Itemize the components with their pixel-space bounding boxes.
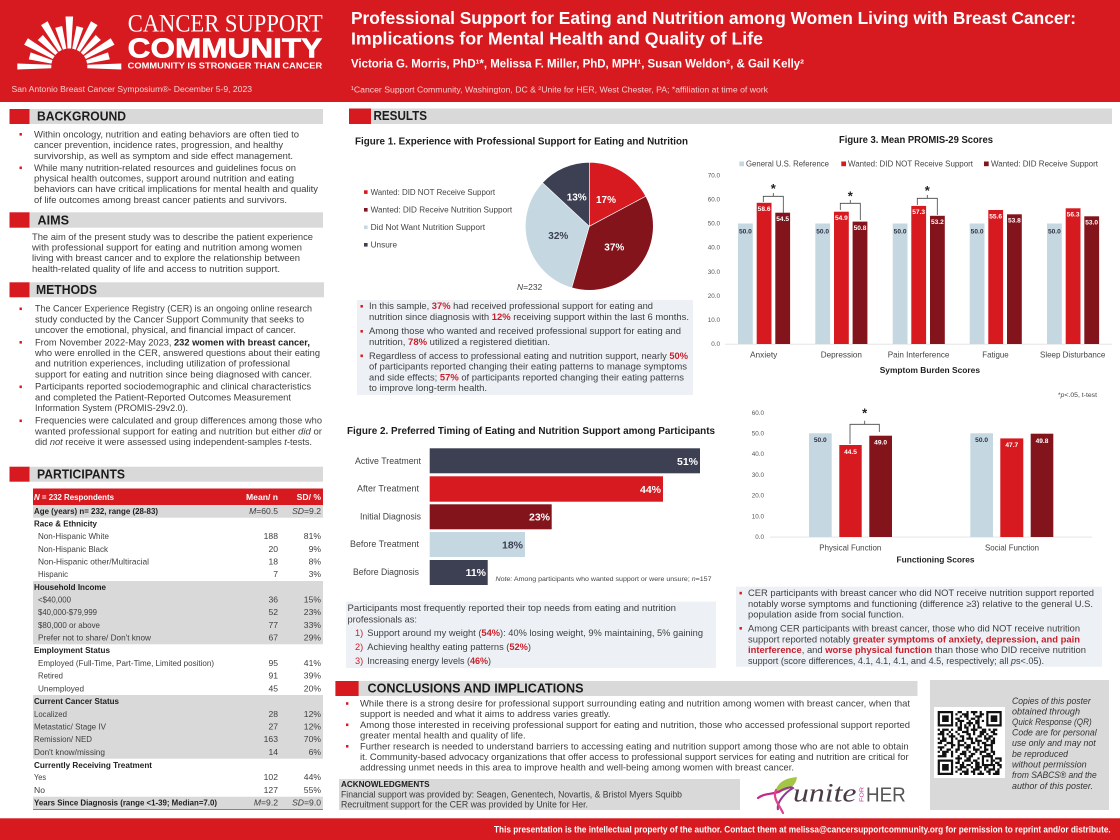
text block: methods bullets: uncover the emotional, physical, and financial impact of cancer. (35, 325, 296, 335)
bar chart: symptom burden scores: 50.8 (854, 225, 867, 232)
table: respondent characteristics: $40,000-$79,999 (38, 607, 97, 617)
callout: figure 3 findings: notably worse symptoms and functioning (difference ≥3) relative to the general U.S. (748, 599, 1093, 609)
table: respondent characteristics: 91 (268, 670, 278, 680)
legend: figure 1: Unsure (371, 240, 397, 250)
horizontal bar chart: Active Treatment (355, 456, 422, 466)
significance brackets (763, 181, 937, 220)
table: respondent characteristics: 52 (268, 607, 278, 617)
legend: figure 1 (364, 187, 513, 250)
table: respondent characteristics: Age (years) n= 232, range (28-83) (34, 506, 158, 516)
table: respondent characteristics: M=60.5 (249, 506, 278, 516)
table: respondent characteristics: 70% (304, 734, 321, 744)
bar chart: functioning scores: Physical Function (819, 543, 882, 553)
table: respondent characteristics: Don't know/missing (34, 747, 105, 757)
horizontal bar chart: After Treatment (357, 484, 420, 494)
table: respondent characteristics: SD=9.2 (292, 506, 321, 516)
text block: QR notice: from SABCS® and the (1012, 770, 1097, 780)
table: respondent characteristics: 7 (273, 569, 278, 579)
text block: conclusions: Among those interested in receiving professional support for eating and nutrition, those who accessed professional support reported (360, 720, 910, 730)
table: respondent characteristics: 14 (268, 747, 278, 757)
text block: methods bullets: and nutrition experiences, including utilization of professional (35, 359, 290, 369)
table: respondent characteristics: 45 (268, 684, 278, 694)
text block: background bullets: of life outcomes among breast cancer patients and survivors. (34, 195, 287, 205)
text block: background bullets: While many nutrition-related resources and guidelines focus on (34, 163, 296, 173)
callout: top needs: Support around my weight (54%): 40% losing weight, 9% maintaining, 5% gaining (367, 628, 703, 638)
callout: figure 1 findings: Regardless of access to professional eating and nutrition support, nearly 50% (369, 351, 688, 361)
callout: top needs: Achieving healthy eating patterns (52%) (367, 642, 531, 652)
logo: Unite for HER: HER (866, 784, 906, 807)
text block: methods bullets: Frequencies were calculated and group differences among those who (35, 416, 322, 426)
horizontal bar chart: 11% (466, 567, 487, 579)
logo: Unite for HER: unite (793, 779, 856, 808)
significance bracket: * (862, 406, 868, 420)
horizontal bar chart (350, 448, 700, 585)
figure 3 title: Figure 3. Mean PROMIS-29 Scores (839, 135, 993, 146)
panel: acknowledgments: Recruitment support for the CER was provided by Unite for Her. (341, 799, 588, 809)
text block: aims: living with breast cancer and to explore the relationship between (32, 253, 300, 263)
text block: QR notice: be reproduced (1012, 749, 1069, 759)
table: respondent characteristics: 12% (304, 722, 321, 732)
text block: conclusions: support is needed and what it aims to address varies greatly. (360, 709, 610, 719)
table: respondent characteristics: M=9.2 (254, 798, 278, 808)
pie labels: 32% (548, 231, 568, 242)
callout: figure 3 findings: Among CER participants with breast cancer, those who did NOT receive nutrition (748, 624, 1080, 634)
callout: figure 1 findings: nutrition since diagnosis with 12% receiving support within the last 6 months. (369, 312, 689, 322)
text block: conclusions: addressing unmet needs in this area to improve health and well-being among women with breast cancer. (360, 763, 794, 773)
icon: QR code (934, 707, 1005, 778)
bar chart: symptom burden scores: 53.0 (1085, 220, 1098, 227)
bar chart: symptom burden scores: 55.6 (989, 213, 1002, 220)
bar chart: symptom burden scores: 0.0 (711, 341, 720, 348)
authors: Victoria G. Morris, PhD¹*, Melissa F. Miller, PhD, MPH¹, Susan Weldon², & Gail Kelly² (351, 59, 804, 71)
table: respondent characteristics: Mean/ n (246, 492, 278, 502)
text block: aims: The aim of the present study was to describe the patient experience (32, 232, 313, 242)
heading: results: RESULTS (374, 108, 427, 123)
text block: methods bullets: who were enrolled in the CER, answered questions about their eating (34, 348, 320, 358)
bar chart: functioning scores: 20.0 (752, 493, 764, 500)
table: respondent characteristics: 188 (264, 531, 278, 541)
text block: methods bullets: did not receive it were assessed using independent-samples t-tests. (35, 437, 312, 447)
text block: methods bullets (20, 304, 322, 447)
bar chart: symptom burden scores: 54.9 (835, 215, 848, 222)
callout: top needs: professionals as: (348, 614, 417, 624)
text block: QR notice: Quick Response (QR) (1012, 717, 1092, 727)
pie labels: 37% (604, 243, 624, 254)
table: respondent characteristics: 102 (264, 772, 278, 782)
text block: background bullets: behaviors can have critical implications for mental health and quality (34, 184, 318, 194)
figure 1 title: Figure 1. Experience with Professional Support for Eating and Nutrition (355, 136, 688, 148)
table: respondent characteristics: Remission/ NED (34, 734, 92, 744)
axis title: functioning: Functioning Scores (896, 554, 975, 564)
bar chart: symptom burden scores: 54.5 (776, 216, 789, 223)
table: respondent characteristics: 9% (309, 544, 321, 554)
panel: methods (10, 282, 324, 447)
callout: figure 3 findings: interference, and worse physical function than those who DID receive nutrition (748, 645, 1086, 655)
text block: QR notice: Code are for personal (1012, 727, 1098, 737)
pie chart (525, 162, 653, 290)
horizontal bar chart: Before Diagnosis (353, 567, 420, 577)
callout: top needs: Increasing energy levels (46%) (367, 656, 491, 666)
table: respondent characteristics: 33% (304, 620, 321, 630)
bar chart: symptom burden scores: 50.0 (894, 228, 907, 236)
bar chart: functioning scores: 49.0 (874, 440, 887, 446)
bar chart: functioning scores: Social Function (985, 543, 1039, 553)
table: respondent characteristics: Household Income (34, 582, 106, 592)
pie labels (548, 192, 624, 254)
panel: acknowledgments (339, 779, 740, 810)
table: respondent characteristics: Years Since Diagnosis (range <1-39; Median=7.0) (34, 798, 217, 808)
heading: methods (10, 282, 324, 297)
table: respondent characteristics: Race & Ethnicity (34, 518, 97, 528)
text block: methods bullets: support for eating and nutrition since being diagnosed with cancer. (35, 369, 312, 379)
legend: figure 3: Wanted: DID NOT Receive Support (848, 159, 974, 169)
text block: QR notice (1012, 696, 1098, 791)
table: respondent characteristics: 8% (309, 556, 321, 566)
bar chart: symptom burden scores: 50.0 (708, 221, 720, 228)
text block: conclusions: Further research is needed to understand barriers to accessing eating and nutrition support among those who are not able to obtain (360, 741, 909, 751)
text block: aims: health-related quality of life and access to nutrition support. (32, 264, 280, 274)
callout: figure 3 findings: population aside from social function. (748, 610, 904, 620)
table: respondent characteristics: SD=9.0 (292, 798, 321, 808)
legend: figure 1: Wanted: DID Receive Nutrition Support (371, 205, 513, 215)
bar chart: symptom burden scores: 58.6 (758, 206, 771, 213)
text block: methods bullets: From November 2022-May 2023, 232 women with breast cancer, (35, 337, 310, 347)
bar chart: symptom burden scores (708, 172, 1112, 375)
bar chart: functioning scores: 60.0 (752, 410, 764, 417)
bar chart: symptom burden scores: 10.0 (708, 317, 720, 324)
legend: figure 1: Did Not Want Nutrition Support (371, 222, 486, 232)
bar chart: symptom burden scores: 56.3 (1067, 212, 1080, 219)
bar chart: symptom burden scores: 30.0 (708, 269, 720, 276)
table: respondent characteristics: 163 (264, 734, 278, 744)
table: respondent characteristics: 6% (309, 747, 321, 757)
table: respondent characteristics: 95 (268, 658, 278, 668)
text block: aims: with professional support for eating and nutrition among women (31, 243, 302, 253)
text block: QR notice: author of this poster. (1012, 781, 1093, 791)
bar chart: symptom burden scores: 53.8 (1008, 218, 1021, 225)
table: respondent characteristics: <$40,000 (38, 594, 71, 604)
heading: results (349, 108, 1112, 124)
panel: aims (10, 212, 323, 274)
callout: top needs: 1) (355, 628, 363, 638)
text block: conclusions: greater mental health and quality of life. (360, 731, 526, 741)
footer banner (0, 818, 1120, 840)
callout: top needs: 3) (355, 656, 363, 666)
callout: figure 3 findings: support (score differences, 4.1, 4.1, 4.1, and 4.5, respectively; all ps<.05). (748, 656, 1044, 666)
table: respondent characteristics: 28 (268, 709, 278, 719)
text block: methods bullets: Information System (PROMIS-29v2.0). (35, 403, 188, 413)
table: respondent characteristics: Metastatic/ Stage IV (34, 722, 106, 732)
logo: Cancer Support Community (17, 11, 323, 70)
horizontal bar chart: 44% (640, 484, 662, 496)
title (351, 8, 1076, 48)
callout: figure 1 findings: nutrition, 78% utilized a registered dietitian. (369, 337, 550, 347)
text block: methods bullets: The Cancer Experience Registry (CER) is an ongoing online research (35, 304, 312, 314)
heading: participants: PARTICIPANTS (37, 466, 125, 481)
table: respondent characteristics: 15% (304, 594, 321, 604)
table: respondent characteristics: 55% (304, 785, 321, 795)
table: respondent characteristics: Current Cancer Status (34, 696, 119, 706)
table: respondent characteristics: Non-Hispanic other/Multiracial (38, 556, 149, 566)
bar chart: symptom burden scores: 70.0 (708, 172, 720, 179)
bar chart: functioning scores: 49.8 (1036, 438, 1049, 445)
text block: background bullets (20, 130, 318, 205)
logo: Unite for HER (758, 777, 906, 813)
callout: figure 1 findings: and side effects; 57% of participants reported changing their eating patterns (369, 372, 684, 382)
table: respondent characteristics: SD/ % (297, 492, 321, 502)
bar chart: functioning scores: 50.0 (814, 437, 827, 444)
table: respondent characteristics: 27 (268, 722, 278, 732)
legend: figure 1: Wanted: DID NOT Receive Support (371, 187, 496, 197)
bar chart: symptom burden scores: 50.0 (816, 228, 829, 236)
logo: Cancer Support Community: COMMUNITY IS STRONGER THAN CANCER (128, 60, 323, 70)
table: respondent characteristics: $80,000 or above (38, 620, 100, 630)
table: respondent characteristics: 81% (304, 531, 321, 541)
legend: figure 3: General U.S. Reference (746, 159, 829, 169)
table: respondent characteristics: Localized (34, 709, 67, 719)
callout: figure 3 findings (736, 587, 1102, 667)
heading: aims: AIMS (38, 212, 69, 227)
title: Professional Support for Eating and Nutrition among Women Living with Breast Cancer: (351, 8, 1076, 28)
table: respondent characteristics: 127 (264, 785, 278, 795)
table: respondent characteristics: 20% (304, 684, 321, 694)
heading: participants (10, 466, 323, 482)
logo: Cancer Support Community: COMMUNITY (128, 32, 323, 63)
heading: conclusions: CONCLUSIONS AND IMPLICATIONS (368, 681, 584, 696)
table: respondent characteristics: 41% (304, 658, 321, 668)
heading: methods: METHODS (36, 282, 97, 297)
table: respondent characteristics: N = 232 Respondents (34, 492, 114, 502)
callout: figure 3 findings: support reported notably greater symptoms of anxiety, depression, and pain (748, 634, 1080, 644)
table: respondent characteristics: Unemployed (38, 684, 84, 694)
table: respondent characteristics: 3% (309, 569, 321, 579)
horizontal bar chart: Initial Diagnosis (360, 512, 422, 522)
bar chart: functioning scores (752, 406, 1092, 564)
note: figure 2: Note: Among participants who wanted support or were unsure; n=157 (496, 576, 712, 583)
text block: QR notice: Copies of this poster (1012, 696, 1092, 706)
table: respondent characteristics: Non-Hispanic Black (38, 544, 109, 554)
table: respondent characteristics: Retired (38, 670, 63, 680)
title: Implications for Mental Health and Quality of Life (351, 28, 763, 48)
horizontal bar chart: Before Treatment (350, 539, 420, 549)
bar chart: functioning scores: 0.0 (755, 534, 764, 541)
panel: acknowledgments: Financial support was provided by: Seagen, Genentech, Novartis, & Bristol Myers Squibb (341, 789, 682, 799)
table: respondent characteristics: Prefer not to share/ Don't know (38, 632, 152, 642)
text block: methods bullets: Participants reported sociodemographic and clinical characteristics (35, 382, 311, 392)
text block: methods bullets: wanted professional support for eating and nutrition but either did or (34, 426, 322, 436)
axis title: symptom burden: Symptom Burden Scores (880, 365, 980, 375)
significance brackets: * (771, 181, 777, 196)
table: respondent characteristics: 29% (304, 632, 321, 642)
bar chart: functioning scores: 30.0 (752, 472, 764, 479)
bar chart: symptom burden scores: Fatigue (982, 350, 1009, 360)
bar chart: symptom burden scores: Pain Interference (888, 350, 950, 360)
table: respondent characteristics: Hispanic (38, 569, 69, 579)
panel: acknowledgments: ACKNOWLEDGMENTS (341, 779, 430, 789)
text block: methods bullets: study conducted by the Cancer Support Community that seeks to (35, 314, 304, 324)
panel: figure 1 pie chart (355, 136, 693, 395)
panel: participants (10, 466, 323, 810)
bar chart: symptom burden scores: 50.0 (739, 228, 752, 236)
panel: figure 3 symptom chart (708, 135, 1112, 399)
text block: conclusions: While there is a strong desire for professional support surrounding eating and nutrition among women with breast cancer, when that (360, 698, 910, 708)
panel: conclusions (335, 681, 917, 773)
logo: Unite for HER: FOR (860, 787, 866, 802)
callout: top needs: Participants most frequently reported their top needs from eating and nutrition (348, 603, 676, 613)
significance note: *p<.05, t-test (1058, 392, 1097, 399)
table: respondent characteristics: 39% (304, 670, 321, 680)
bar chart: symptom burden scores: 50.0 (971, 228, 984, 236)
text block: conclusions (346, 698, 910, 773)
heading: aims (10, 212, 323, 228)
table: respondent characteristics: 77 (268, 620, 278, 630)
bar chart: symptom burden scores: 40.0 (708, 245, 720, 252)
bar chart: symptom burden scores: Depression (821, 350, 862, 360)
conference line: San Antonio Breast Cancer Symposium®- December 5-9, 2023 (12, 84, 252, 94)
horizontal bar chart: 23% (529, 512, 551, 524)
table: respondent characteristics: 20 (268, 544, 278, 554)
significance bracket (850, 406, 879, 444)
text block: methods bullets: and completed the Patient-Reported Outcomes Measurement (35, 392, 291, 402)
callout: figure 1 findings: to improve long-term health. (369, 383, 487, 393)
table: respondent characteristics: No (34, 785, 45, 795)
table: respondent characteristics: Non-Hispanic White (38, 531, 109, 541)
text block: background bullets: survivorship, as well as symptom and side effect management. (34, 151, 293, 161)
text block: background bullets: Within oncology, nutrition and eating behaviors are often tied to (34, 130, 299, 140)
text block: background bullets: physical health outcomes, support around nutrition and eating (34, 174, 294, 184)
figure 2 title: Figure 2. Preferred Timing of Eating and Nutrition Support among Participants (347, 426, 715, 437)
callout: figure 1 findings: of participants reported changing their eating patterns to manage symptoms (369, 362, 687, 372)
logo: Cancer Support Community: CANCER SUPPORT (128, 11, 323, 38)
horizontal bar chart: 18% (502, 540, 524, 552)
text block: conclusions: it. Community-based advocacy organizations that offer access to professional support services for eating and nutrition are critical for (360, 752, 909, 762)
table: respondent characteristics: 18 (268, 556, 278, 566)
bar chart: functioning scores: 50.0 (975, 437, 988, 444)
significance brackets: * (925, 183, 931, 198)
text block: aims (31, 232, 313, 274)
heading: conclusions (335, 681, 917, 696)
bar chart: symptom burden scores: 53.2 (931, 219, 944, 226)
panel: background (10, 109, 323, 205)
table: respondent characteristics (33, 488, 323, 810)
pie labels: 17% (596, 195, 616, 206)
bar chart: functioning scores: 40.0 (752, 451, 764, 458)
text block: QR notice: obtained through (1012, 706, 1080, 716)
significance brackets: * (848, 188, 854, 204)
bar chart: symptom burden scores: Anxiety (750, 350, 778, 360)
pie labels: 13% (567, 192, 587, 204)
bar chart: symptom burden scores: 20.0 (708, 293, 720, 300)
horizontal bar chart: 51% (677, 456, 699, 468)
bar chart: functioning scores: 10.0 (752, 513, 764, 520)
table: respondent characteristics: Employment Status (34, 645, 110, 655)
panel: QR code notice (930, 680, 1109, 810)
table: respondent characteristics: 36 (268, 594, 278, 604)
heading: background (10, 109, 323, 124)
table: respondent characteristics: Yes (34, 772, 46, 782)
panel: figure 2 bar chart (346, 426, 716, 668)
bar chart: symptom burden scores: Sleep Disturbance (1040, 350, 1106, 360)
table: respondent characteristics: 12% (304, 709, 321, 719)
affiliations: ¹Cancer Support Community, Washington, DC & ²Unite for HER, West Chester, PA; *affiliation at time of work (351, 84, 769, 94)
sample size: N=232 (517, 282, 543, 292)
bar chart: symptom burden scores: 50.0 (1048, 228, 1061, 236)
table: respondent characteristics: 23% (304, 607, 321, 617)
heading: background: BACKGROUND (37, 109, 126, 124)
bar chart: functioning scores: 47.7 (1005, 442, 1019, 449)
callout: top needs (346, 602, 716, 668)
table: respondent characteristics: 44% (304, 772, 321, 782)
bar chart: functioning scores: 50.0 (752, 430, 764, 438)
icon: sunrise rays (17, 16, 121, 70)
panel: functioning chart (736, 406, 1102, 667)
callout: figure 1 findings (357, 300, 693, 395)
text block: background bullets: cancer prevention, incidence rates, progression, and healthy (34, 140, 283, 150)
bar chart: symptom burden scores: 60.0 (708, 196, 720, 204)
callout: figure 3 findings: CER participants with breast cancer who did NOT receive nutrition support reported (748, 588, 1094, 598)
callout: figure 1 findings: Among those who wanted and received professional support for eating and (369, 326, 681, 336)
text block: QR notice: without permission (1012, 760, 1087, 770)
bar chart: functioning scores: 44.5 (844, 449, 857, 456)
legend: figure 3: Wanted: DID Receive Support (991, 159, 1099, 169)
callout: figure 1 findings: In this sample, 37% had received professional support for eating and (369, 301, 653, 311)
legend: figure 3 (739, 159, 1099, 169)
table: respondent characteristics: Currently Receiving Treatment (34, 760, 152, 770)
text block: QR notice: use only and may not (1012, 738, 1096, 748)
table: respondent characteristics: Employed (Full-Time, Part-Time, Limited position) (38, 658, 214, 668)
callout: top needs: 2) (355, 642, 363, 652)
header banner (0, 0, 1120, 102)
bar chart: symptom burden scores: 57.3 (912, 209, 925, 216)
table: respondent characteristics: 67 (268, 632, 278, 642)
